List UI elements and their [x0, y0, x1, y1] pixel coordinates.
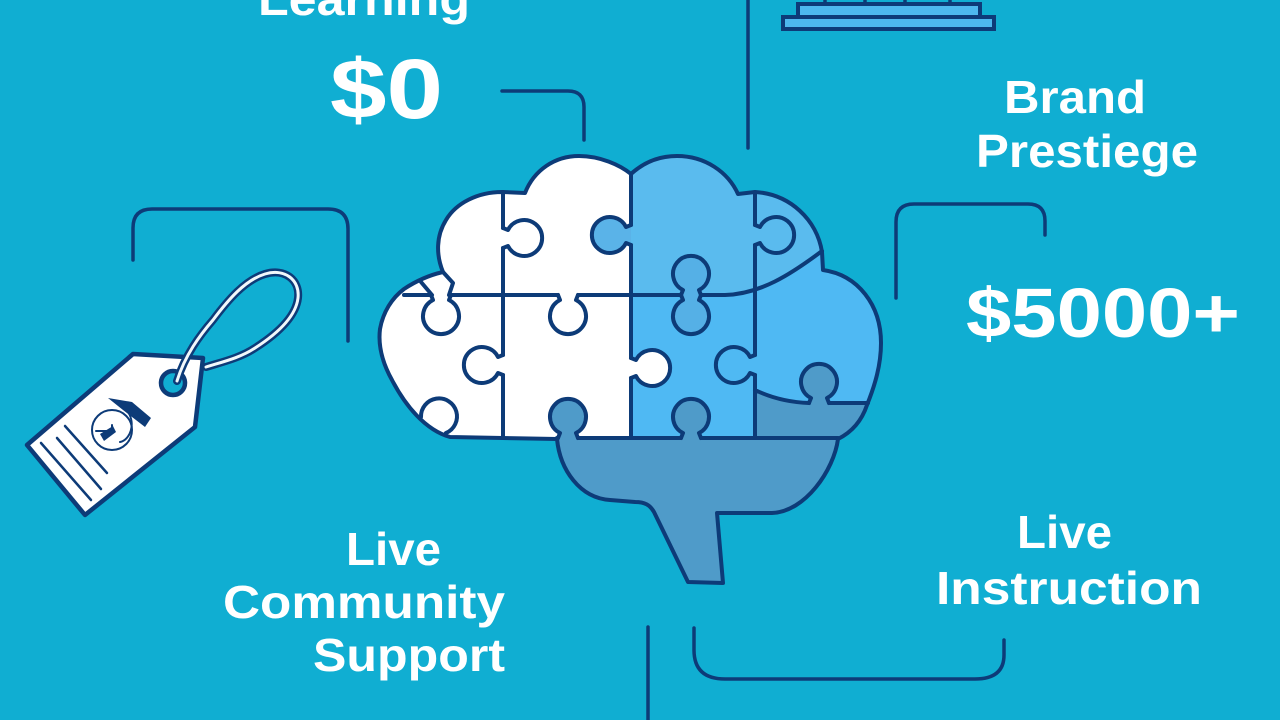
heading: Live Community Support: [223, 523, 505, 681]
heading: Live Instruction: [936, 506, 1202, 614]
heading: Live Instruction: Live: [1017, 506, 1112, 558]
connector: left bracket: [133, 209, 348, 341]
price: $5000+: $5000+: [966, 274, 1240, 352]
heading: Brand Prestiege: Brand: [1004, 71, 1146, 123]
heading: Brand Prestiege: Prestiege: [976, 125, 1198, 177]
connector: right bracket: [896, 204, 1045, 298]
icon: price tag: [27, 272, 298, 515]
heading: Live Community Support: Live: [346, 523, 441, 575]
connector: bottom bracket: [694, 628, 1004, 679]
puzzle brain: [370, 150, 891, 598]
connector: top centre bracket: [502, 91, 584, 140]
heading: Live Community Support: Support: [313, 629, 505, 681]
brain outline: [380, 156, 881, 583]
brain fill regions: [370, 150, 891, 598]
heading: Brand Prestiege: [976, 71, 1198, 177]
price: $0: $0: [330, 42, 443, 136]
puzzle knobs: [421, 217, 837, 438]
icon: building base: [783, 0, 994, 29]
heading: Live Community Support: Community: [223, 576, 505, 628]
puzzle seams: [404, 174, 868, 438]
heading: Live Instruction: Instruction: [936, 562, 1202, 614]
connector: top vertical line: [746, 0, 750, 148]
connector: bottom vertical line: [646, 627, 650, 720]
